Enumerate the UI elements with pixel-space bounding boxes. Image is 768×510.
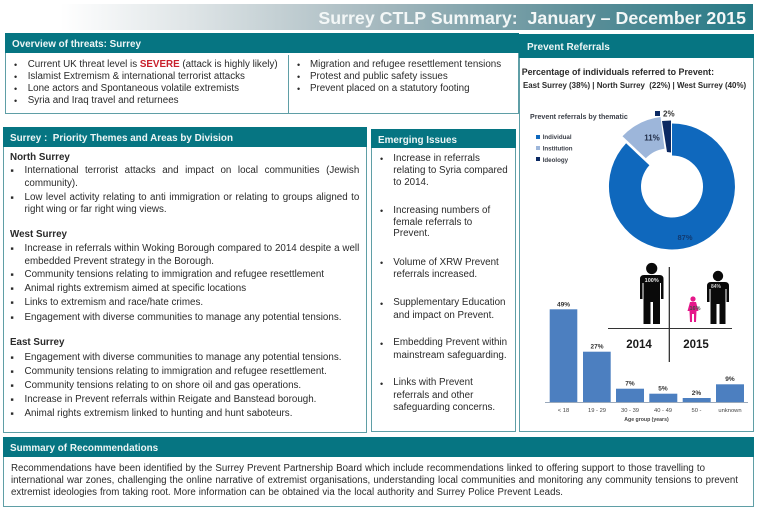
threat list left: •: [14, 60, 17, 70]
emerging issues list: •: [380, 206, 383, 216]
emerging issues list: Prevent.: [393, 228, 430, 239]
East Surrey block: Engagement with diverse communities to manage any potential tensions.: [24, 352, 341, 362]
bar chart: age group: 7%: [625, 380, 635, 388]
title banner: [0, 4, 753, 30]
East Surrey block: [10, 336, 341, 418]
donut chart: referrals by thematic: 11%: [644, 134, 660, 142]
East Surrey block: ■: [10, 396, 14, 402]
East Surrey block: Animal rights extremism linked to hunting and hunt saboteurs.: [24, 408, 292, 418]
referral percentage heading: Percentage of individuals referred to Prevent:: [522, 67, 714, 77]
East Surrey block: ■: [10, 382, 14, 388]
West Surrey block: Engagement with diverse communities to manage any potential tensions.: [24, 312, 341, 322]
emerging issues list: •: [380, 258, 383, 268]
emerging issues list: female referrals to: [393, 216, 472, 228]
emerging issues list: Volume of XRW Prevent: [393, 256, 499, 268]
threat list left: Islamist Extremism & international terrorist attacks: [28, 71, 245, 82]
emerging issues list: Links with Prevent: [393, 377, 473, 388]
threat list right: Migration and refugee resettlement tensions: [310, 59, 501, 70]
threat list left: •: [14, 96, 17, 106]
West Surrey block: Links to extremism and race/hate crimes.: [24, 297, 203, 308]
heading: summary of recommendations: [3, 437, 754, 457]
North Surrey block: ■: [10, 168, 14, 174]
heading: emerging issues: [371, 129, 516, 148]
recommendations text: extremist ideologies from taking root. More information can be obtained via the local authority and Surrey Police Prevent Leads.: [11, 486, 563, 498]
bar chart: age group: 49%: [557, 302, 570, 308]
North Surrey block: International terrorist attacks and impact on local communities (Jewish: [24, 165, 359, 176]
threat list right: Prevent placed on a statutory footing: [310, 83, 470, 94]
panel: priority themes: [3, 127, 367, 433]
emerging issues list: and impact on Prevent.: [393, 310, 494, 320]
West Surrey block: ■: [10, 314, 14, 320]
heading: priority themes: Surrey : Priority Themes and Areas by Division: [10, 133, 233, 144]
East Surrey block: Increase in Prevent referrals within Reigate and Banstead borough.: [24, 394, 316, 404]
North Surrey block: North Surrey: [10, 152, 70, 162]
East Surrey block: ■: [10, 354, 14, 360]
threat list left: •: [14, 72, 17, 82]
North Surrey block: right wing or far right wing views.: [24, 204, 167, 214]
emerging issues list: •: [380, 378, 383, 388]
bar chart: age group: unknown: [718, 408, 742, 414]
gender comparison pictogram: 16%: [689, 306, 701, 312]
West Surrey block: ■: [10, 300, 14, 306]
West Surrey block: [10, 228, 359, 322]
panel: summary of recommendations: [3, 437, 754, 507]
heading: overview: Overview of threats: Surrey: [12, 39, 141, 50]
title: Surrey CTLP Summary: January – December 2015: [318, 8, 746, 28]
emerging issues list: mainstream safeguarding.: [393, 350, 507, 360]
referral percentage by division: East Surrey (38%) | North Surrey (22%) | West Surrey (40%): [523, 80, 746, 90]
emerging issues list: Supplementary Education: [393, 297, 506, 308]
bar chart: age group: [545, 302, 748, 423]
gender comparison pictogram: 100%: [645, 278, 659, 284]
heading: priority themes: [3, 127, 367, 147]
West Surrey block: ■: [10, 246, 14, 252]
heading: prevent referrals: [519, 34, 754, 58]
emerging issues list: relating to Syria compared: [393, 165, 508, 176]
gender comparison pictogram: 2015: [683, 339, 709, 351]
threat list right: Protest and public safety issues: [310, 71, 448, 82]
West Surrey block: ■: [10, 272, 14, 278]
donut legend: Prevent referrals by thematic: [530, 113, 628, 121]
West Surrey block: West Surrey: [10, 228, 67, 240]
threat list left: •: [14, 84, 17, 94]
East Surrey block: East Surrey: [10, 336, 64, 348]
icon: male figure 2014: [640, 263, 664, 324]
North Surrey block: ■: [10, 194, 14, 200]
icon: male figure 2015: [707, 271, 729, 324]
East Surrey block: Community tensions relating to immigration and refugee resettlement.: [24, 366, 327, 376]
panel: prevent referrals: [519, 34, 754, 432]
threat list left: [6, 55, 289, 113]
heading: prevent referrals: Prevent Referrals: [527, 42, 610, 53]
donut legend: Institution: [543, 146, 573, 152]
threat list left: Current UK threat level is SEVERE (attack is highly likely): [28, 59, 278, 70]
East Surrey block: ■: [10, 410, 14, 416]
West Surrey block: ■: [10, 286, 14, 292]
North Surrey block: Low level activity relating to anti immigration or relating to groups aligned to: [24, 192, 359, 202]
donut chart: referrals by thematic: 2%: [663, 110, 675, 118]
bar chart: age group: 2%: [692, 390, 701, 397]
bar chart: age group: 9%: [725, 376, 735, 383]
bar chart: age group: 19 - 29: [588, 408, 606, 414]
recommendations text: [11, 462, 738, 498]
gender comparison pictogram: [608, 263, 732, 362]
threat list right: •: [297, 60, 300, 70]
bar chart: age group: 40 - 49: [654, 408, 672, 414]
West Surrey block: Community tensions relating to immigration and refugee resettlement: [24, 269, 324, 280]
gender comparison pictogram: 84%: [711, 284, 722, 290]
threat list left: Lone actors and Spontaneous volatile extremists: [28, 83, 239, 94]
North Surrey block: community).: [24, 178, 78, 188]
East Surrey block: ■: [10, 368, 14, 374]
threat list right: •: [297, 72, 300, 82]
panel: overview of threats: [5, 33, 519, 114]
bar chart: age group: < 18: [558, 408, 569, 414]
heading: summary of recommendations: Summary of Recommendations: [10, 443, 158, 454]
threat list right: •: [297, 84, 300, 94]
donut chart: referrals by thematic: [609, 110, 735, 250]
emerging issues list: Increasing numbers of: [393, 205, 490, 216]
recommendations text: Recommendations have been identified by the Surrey Prevent Partnership Board which include recommendations linked to offering support to those travelling to: [11, 462, 705, 474]
East Surrey block: Community tensions relating to on shore oil and gas operations.: [24, 380, 301, 390]
bar chart: age group: 5%: [658, 386, 668, 392]
West Surrey block: Increase in referrals within Woking Borough compared to 2014 despite a well: [24, 243, 359, 254]
emerging issues list: [380, 153, 508, 412]
emerging issues list: referrals increased.: [393, 269, 477, 280]
donut chart: referrals by thematic: 87%: [677, 233, 693, 242]
bar chart: age group: 27%: [590, 344, 604, 350]
heading: overview: [5, 33, 519, 53]
emerging issues list: referrals and other: [393, 390, 473, 400]
emerging issues list: Embedding Prevent within: [393, 337, 507, 348]
emerging issues list: •: [380, 154, 383, 164]
gender comparison pictogram: 2014: [626, 339, 652, 351]
emerging issues list: safeguarding concerns.: [393, 402, 495, 412]
threat list right: [297, 59, 501, 94]
North Surrey block: [10, 152, 359, 214]
heading: emerging issues: Emerging Issues: [378, 135, 457, 146]
panel: emerging issues: [371, 129, 516, 432]
emerging issues list: to 2014.: [393, 177, 429, 188]
emerging issues list: •: [380, 298, 383, 308]
bar chart: age group: 30 - 39: [621, 408, 639, 414]
donut legend: Individual: [543, 134, 572, 141]
icon: female figure 2015: [688, 296, 698, 322]
recommendations text: international war zones, challenging the online narrative of extremist organisations, understanding local communities and monitoring any community tensions to prevent: [11, 474, 738, 486]
West Surrey block: embedded Prevent strategy in the Borough.: [24, 256, 214, 266]
emerging issues list: •: [380, 338, 383, 348]
emerging issues list: Increase in referrals: [393, 153, 480, 164]
donut legend: Ideology: [543, 157, 569, 164]
donut legend: [530, 113, 628, 164]
West Surrey block: Animal rights extremism aimed at specific locations: [24, 283, 246, 294]
threat list left: Syria and Iraq travel and returnees: [28, 94, 179, 106]
bar chart: age group: Age group (years): [624, 417, 669, 423]
bar chart: age group: 50 -: [692, 408, 702, 414]
